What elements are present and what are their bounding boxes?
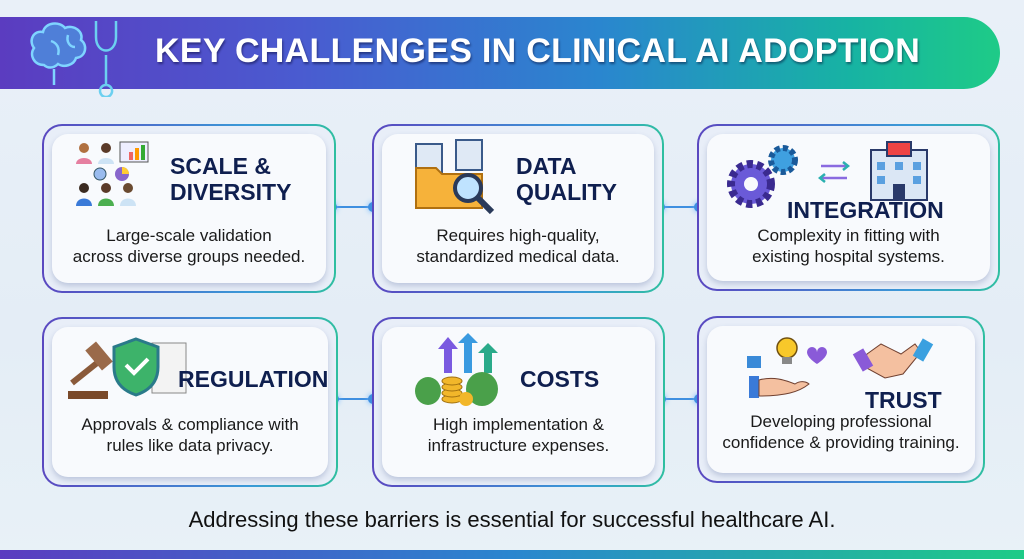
panel: scale & diversity: Large-scale validation bbox=[106, 226, 272, 245]
panel: trust: TRUST bbox=[865, 387, 942, 413]
panel: costs: infrastructure expenses. bbox=[428, 436, 609, 455]
icon: brain and stethoscope bbox=[30, 21, 118, 97]
icon: gavel and shield bbox=[68, 337, 186, 399]
panel: data quality: Requires high-quality, bbox=[436, 226, 600, 245]
icon: folder with magnifier bbox=[415, 139, 494, 214]
icon: money bags and arrows bbox=[415, 333, 498, 406]
title banner bbox=[0, 17, 1000, 89]
panel: data quality: standardized medical data. bbox=[416, 247, 620, 266]
bottom bar bbox=[0, 550, 1024, 559]
panel: data quality bbox=[372, 124, 664, 293]
panel: scale & diversity: across diverse groups needed. bbox=[73, 247, 305, 266]
icon: hand with bulb and handshake bbox=[747, 337, 934, 398]
footer text: Addressing these barriers is essential for successful healthcare AI. bbox=[189, 507, 835, 532]
panel: costs: COSTS bbox=[520, 366, 599, 392]
panel: integration: Complexity in fitting with bbox=[757, 226, 940, 245]
panel: costs: High implementation & bbox=[433, 415, 604, 434]
panel: regulation: Approvals & compliance with bbox=[81, 415, 299, 434]
panel: data quality: DATA bbox=[516, 153, 576, 179]
panel: integration: existing hospital systems. bbox=[752, 247, 945, 266]
panel: trust: Developing professional bbox=[750, 412, 932, 431]
panel: scale & diversity: DIVERSITY bbox=[170, 179, 291, 205]
panel: regulation bbox=[42, 317, 338, 487]
title banner: KEY CHALLENGES IN CLINICAL AI ADOPTION bbox=[155, 32, 920, 70]
panel: trust: confidence & providing training. bbox=[722, 433, 960, 452]
panel: scale & diversity bbox=[42, 124, 336, 293]
panel: trust bbox=[697, 316, 985, 483]
panel: costs bbox=[372, 317, 665, 487]
icon: gears, arrows and hospital bbox=[727, 141, 928, 208]
panel: regulation: rules like data privacy. bbox=[107, 436, 273, 455]
panel: integration bbox=[697, 124, 1000, 291]
panel: data quality: QUALITY bbox=[516, 179, 617, 205]
panel: scale & diversity: SCALE & bbox=[170, 153, 271, 179]
panel: integration: INTEGRATION bbox=[787, 197, 944, 223]
connectors bbox=[330, 206, 378, 208]
panel: regulation: REGULATION bbox=[178, 366, 328, 392]
icon: people & charts bbox=[76, 142, 148, 206]
